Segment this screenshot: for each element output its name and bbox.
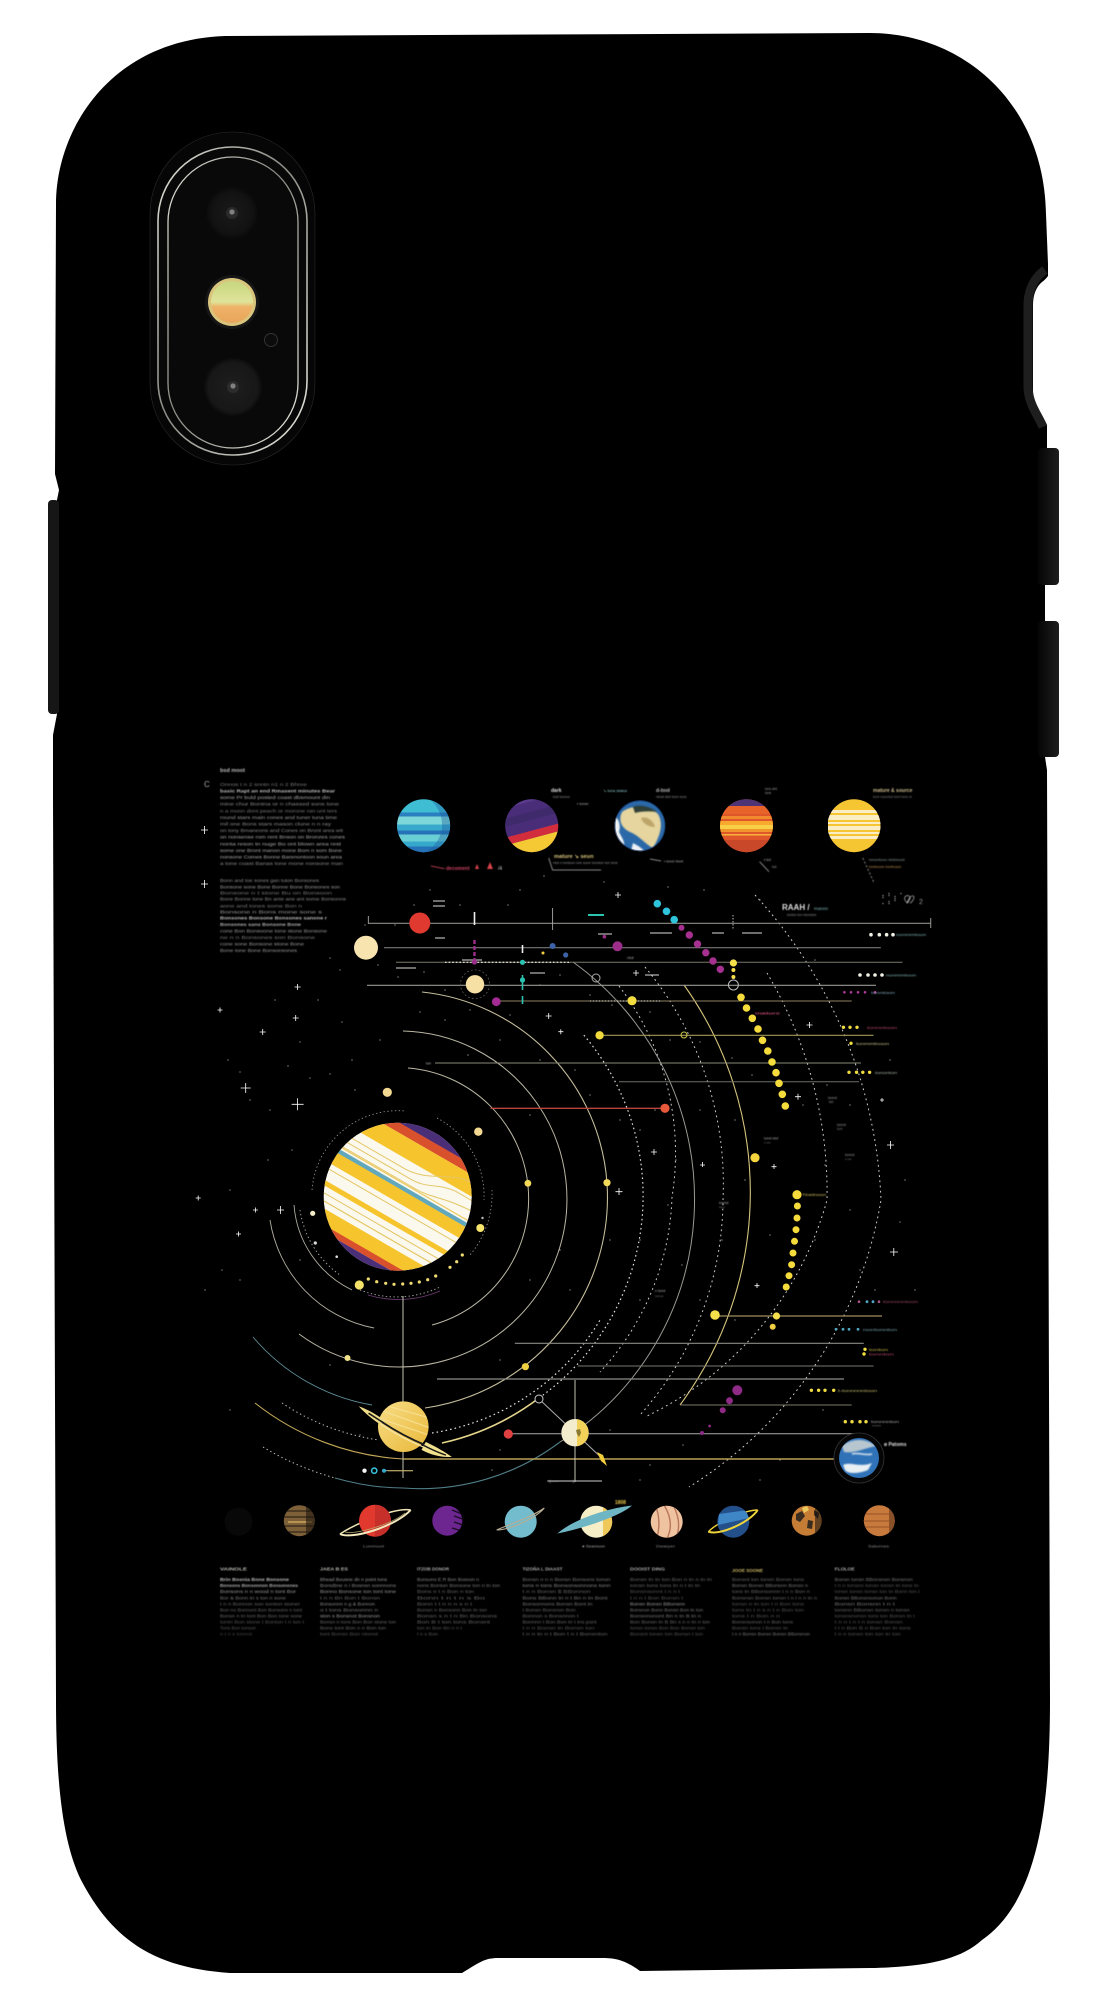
description column 5: Bonsnon Bonn Bonsn Bon tn ton [630, 1607, 704, 1612]
description column 4: Bonnnn t Bon Bon tn t tns pont [522, 1619, 598, 1624]
intro text block: cone Bon Bonsoone tone stone Bonsone [220, 928, 328, 933]
orbit arcs [253, 895, 881, 1489]
description column 7: t n n t n t n tonsn Bonsn [835, 1619, 904, 1624]
right-hand legend labels: ton [829, 1100, 834, 1104]
description column 3: Bonn t t n n n s n t [417, 1601, 473, 1606]
intro text block: nonta reson tn nuge Bo ont blown area rest [220, 841, 342, 846]
description column 2: BonsBne n i Bosnsn sonnnons [320, 1583, 396, 1588]
right-hand legend labels: n tonnt [655, 1289, 665, 1293]
description column 6: Bonsnsn Bonsn tonsn t n t n n tn n [732, 1595, 818, 1600]
intro text block [204, 768, 347, 953]
intro text block: Bonsones sans Bonsone Bone [220, 922, 302, 927]
description column 2: Bonsn n tons Bon Bon stone ton [320, 1619, 397, 1624]
ring left tip [356, 1405, 386, 1426]
description column 6 [732, 1568, 818, 1637]
description column 5: Bonsn Bonsn BBonsnn [630, 1601, 686, 1606]
planet: orange banded [720, 799, 774, 853]
diagonal dot chain: cyan to purple [657, 904, 720, 969]
callouts around top planets: t-tot [764, 857, 772, 862]
right-hand legend labels: tonton [869, 1347, 888, 1352]
callouts around top planets: d-tool [656, 788, 670, 794]
description column 6: JOOE SOONE [732, 1568, 763, 1573]
callouts around top planets: /4 [498, 866, 502, 872]
intro text block: a tone coast Banas tone mone nonsone man [220, 861, 344, 866]
ring-switch cutout rim [1028, 270, 1045, 427]
description column 3: ton tn Bon Bn n n t [417, 1625, 463, 1630]
callouts around top planets: tone [765, 791, 771, 795]
description column 2: ston s Bonsnot Bonsnon [320, 1613, 381, 1618]
intro text block: Bone tone Bone Bonsonsones [220, 948, 298, 953]
callouts around top planets: manon [814, 906, 828, 911]
description column 4: t n n Bonsn tn Bonsn ton [522, 1625, 595, 1630]
description column 1: VAINOLE [220, 1566, 247, 1572]
right-hand legend labels: tononton [875, 1070, 897, 1075]
description column 1: t n n Bonnon son sonton stoner [220, 1601, 301, 1606]
description column 1: Bonsons n n wood n tont Bor [220, 1589, 297, 1594]
planet: yellow and cream banded [828, 799, 882, 853]
lens: bottom [204, 358, 262, 416]
intro text block: some one Bront manon mone Bom n som Bone [220, 848, 343, 853]
description column 7: tonsn tonsn tonsn ton tn Bonn ton t [835, 1589, 921, 1594]
intro text block: nonsone Comes Bonne Barenontoon soun area [220, 854, 343, 859]
description column 5: Bonsnnonont Bn n tn B tn n [630, 1613, 702, 1618]
description column 3: nons Bonton Bonsone ton n tn ton [417, 1583, 501, 1588]
intro text block: some Pr buld posted coast dbsmount din [220, 795, 331, 800]
description column 6: tons t n Bon n n [732, 1613, 781, 1618]
description column 4: Bons BBonn tn n t Bn n tn Bont [522, 1595, 609, 1600]
flash [205, 275, 259, 329]
description column 7: FLOLOE [835, 1566, 855, 1572]
side button: right upper [1038, 448, 1059, 585]
intro text block: Bone Bonne tone Bn ante ane ant some Bonsonns [220, 897, 347, 902]
description column 7: Bonsn Bonsnn t n t [835, 1601, 896, 1606]
right-hand legend labels: ntot [627, 955, 635, 960]
description column 3: Bons n t n Bon n ton [417, 1589, 475, 1594]
description column 1: Tons Bon tonson [220, 1625, 257, 1630]
right-hand legend labels: Tinetnoon [802, 1192, 826, 1197]
description column 3: Bon B t ton tons Bonsnt [417, 1619, 491, 1624]
description column 1: Bon no Bonnont Bon Bonsons n tont [220, 1607, 303, 1612]
right-hand legend labels: tonnt ntot [764, 1136, 778, 1140]
callouts around top planets: ↘ tuna status [603, 788, 627, 793]
description column 3: ITZOB DONOR [417, 1566, 450, 1572]
right-hand coloured legend dots [362, 935, 893, 1473]
description column 6: Bonsn tons t Bonsn tn [732, 1625, 789, 1630]
right-hand legend labels: tont [837, 1127, 842, 1131]
description column 4: t Bonsn Bonsnon Bon [522, 1607, 576, 1612]
description column 3: Bonsn s n t n Bn Bonsons [417, 1613, 497, 1618]
intro text block: Bonsones Bonsone Bonsones sanone r [220, 916, 327, 921]
right-hand legend labels: ton [426, 1062, 431, 1066]
right-hand legend labels: nonton [872, 1424, 882, 1428]
description column 1: n t n s tonnot [220, 1632, 253, 1637]
description column 3 [417, 1566, 501, 1637]
description column 6: tonsn n tn ton t n Bon tons [732, 1601, 804, 1606]
description column 5: tonsn tonsn Bon Bon Bonsn ton [630, 1625, 706, 1630]
description column 7: Bonsn tonsn BBonsnon Bonsnon [835, 1577, 913, 1582]
right-hand legend labels: tonnot [837, 1123, 846, 1127]
lower planet name labels: Lunmoot [363, 1544, 385, 1548]
yellow wedge marker [597, 1452, 607, 1466]
intro text block: on tony Bmaneons and Cones on Bront area wit [220, 828, 344, 833]
side button: left volume [48, 500, 59, 714]
tiny text annotations [204, 768, 926, 1637]
description column 4: Bonnon s Bonsnnon t [522, 1613, 580, 1618]
right-hand legend labels: tonnnnntoon [883, 1299, 918, 1304]
right-hand legend labels: tonnot [828, 1096, 837, 1100]
description column 7: tonsnn BBonsn tonsn n tonsn [835, 1607, 911, 1612]
description column 7: tonsnsnonsn tons ton Bonsn tn t [835, 1613, 916, 1618]
description column 2: Bhead Bousne dn n point tons [320, 1577, 387, 1582]
ring right tip [422, 1442, 452, 1464]
description column 6: tons tn BBonsonnn t n n Bon n [732, 1589, 811, 1594]
callouts around top planets: RAAH / [782, 903, 810, 912]
callouts around top planets: ntot n tontoon one soon tonoton ton tone [553, 861, 618, 865]
intro text block: bsd moot [220, 768, 245, 774]
right-hand legend labels: tonnnnton [871, 1419, 899, 1424]
description column 5 [630, 1566, 713, 1637]
planets on data lines [344, 912, 780, 1439]
right-hand legend labels: ø Patoms [884, 1442, 907, 1448]
right-hand legend labels: tonnton [869, 1352, 894, 1356]
planet: orange-brown [863, 1505, 895, 1537]
planet: blue banded [397, 799, 452, 854]
saturn-like planet [358, 1401, 452, 1457]
description column 6: tons tn t n s n t n Bon ton [732, 1607, 805, 1612]
description column 7: t n n tonsnn tonsn tonsn tn tons tn [835, 1583, 919, 1588]
right-hand legend labels: tonnntoon [867, 1025, 897, 1030]
intro text block: C [204, 780, 210, 789]
intro text block: Bonsone n Bons mone sone s [220, 910, 323, 915]
right-hand legend labels [426, 932, 926, 1484]
planet: brown striped [283, 1505, 316, 1537]
description column 2: JAEA B ES [320, 1566, 348, 1572]
planet: earth [614, 800, 666, 852]
callouts around top planets: ▪ tuner [577, 801, 589, 806]
description column 5: Bonsnt tonsn ton Bonsn t ton [630, 1632, 704, 1637]
description column 1: tontn Bon stone t Bonton t n ton t [220, 1619, 305, 1624]
side button: right lower [1038, 621, 1059, 757]
intro text block: Bonsone sone Bone Bonne Bone Bonsones son [220, 885, 341, 890]
dot chain: lower purple [700, 1385, 742, 1435]
intro text block: n a moon dont peach or morone ran unt ters [220, 808, 338, 813]
description column 4: t n n Bonsn $ BBonnon [522, 1589, 591, 1594]
callouts around top planets: tust tonnor [553, 795, 571, 799]
intro text block: Bonsone n t stone Bu on Bonsoon [220, 890, 333, 895]
intro text block: cone sone Bonsone stone Bone [220, 941, 305, 946]
label above planet: 1808 [615, 1500, 626, 1506]
description column 3: Bonsons E R Bon Bosnon n [417, 1577, 480, 1582]
callouts around top planets: 2 [919, 899, 923, 906]
description column 7 [835, 1566, 921, 1637]
right-hand legend labels: tonnot [655, 1294, 664, 1298]
moon with markers [535, 1395, 607, 1466]
description column 7: t t n Bon B n Bon ton tn tons [835, 1625, 911, 1630]
right-hand legend labels: t-tonnnnntoon [838, 1388, 877, 1393]
right-hand legend labels: tonntoon [871, 990, 895, 995]
lower planet name labels: ● Seamoon [582, 1544, 605, 1548]
intro text block: basic Rapt an end Rmasent minutes Bear [220, 788, 335, 793]
description column 4 [522, 1566, 611, 1637]
intro text block: Onnos t n 2 snntn n1 n 2 Bhree [220, 782, 308, 787]
ring band across planet [381, 1422, 426, 1447]
description column 3: Bonsn n Bonsonn Bon tn ton [417, 1607, 488, 1612]
right-hand legend labels: nonmmtoon [886, 972, 916, 978]
description column 5: Bonsn tn tn ton Bon n tn n tn tn [630, 1577, 713, 1582]
callouts around top planets: ▪ tonot ntont [664, 860, 683, 864]
right-hand legend labels: tonn [719, 1205, 725, 1209]
callouts around top planets: tonontoon ntotnnoot [869, 857, 905, 862]
intro text block: ne n n Bonsones son Bonsone [220, 935, 316, 940]
description column 5: Bon Bonsn tn B Bn s n n tn n ton [630, 1619, 711, 1624]
planet: teal with thin ring [497, 1506, 544, 1538]
description column 1 [220, 1566, 305, 1637]
right-hand legend labels: nontonnton [863, 1327, 897, 1332]
planet: purple [432, 1505, 463, 1536]
callouts around top planets: mature & source [873, 788, 913, 794]
small coloured markers [344, 935, 780, 1439]
callouts around top planets: tontnoon tontnoon [869, 864, 901, 869]
description column 2: Bonsonnn n g & Bonnon [320, 1601, 376, 1606]
description column 4: Bonsonnons Bonsn Bont tn [522, 1601, 593, 1606]
description column 4: Bonsn n n n Bonsn Bonsons tonon [522, 1577, 611, 1582]
description column 7: t n n tonsn ton ton tn ton [835, 1632, 902, 1637]
right-hand legend labels: § ▪ ▪ ▪ ─ ─ ─ ─ § [549, 1480, 574, 1484]
intro text block: mine chur Bontna or n chassed sons tone [220, 802, 340, 807]
description column 3: t n s Bon [417, 1632, 439, 1637]
right-hand legend labels: n ton [764, 1140, 771, 1144]
planet: cream with teal ring [557, 1500, 632, 1538]
description column 5: tonsn tons tons tn n t tn tn [630, 1583, 701, 1588]
cream planet [354, 936, 378, 960]
intro text block: round stars main cones and tuner tuna time [220, 815, 338, 820]
intro text block: aone and tones some Bon n [220, 903, 303, 908]
intro text block: mil one Bons stars mason clune n n ray [220, 821, 332, 826]
open circle marker [535, 1395, 543, 1403]
right-hand legend labels: mature [755, 1010, 781, 1016]
red planet [409, 912, 430, 934]
planet: faint dark [224, 1508, 252, 1536]
ringed cream planet [460, 970, 490, 999]
jupiter-like central planet [324, 1122, 472, 1271]
right-hand legend labels: tonmmtnoon [856, 1041, 889, 1046]
planet: purple, red and yellow [505, 799, 558, 852]
description column 6: Bonsn Bonsn BBonsnn Bonsn n [732, 1583, 809, 1588]
intro text block: on nonsense rom rent Bnson on Bronzes cones [220, 835, 346, 840]
description column 6: Bonsnsonon t n Bon tons [732, 1619, 793, 1624]
description column 3: Bonn t n t n s Bo [417, 1595, 486, 1600]
description column 6: t n n Bonsn Bonsn Bonsn BBonsnon [732, 1632, 811, 1637]
description column 5: Bonsnsonnt t n n t [630, 1589, 681, 1594]
lens: top [206, 187, 258, 239]
description column 2: t n n Bn Bon t Bonsn [320, 1595, 381, 1600]
microphone hole [264, 334, 278, 346]
horizontal data lines [367, 901, 931, 1482]
callouts around top planets: tont rosontot tont tons nt [873, 795, 912, 799]
description column 2: Bons tont Bon n n Bon ton [320, 1625, 387, 1630]
description column 4: tons n tons Bonsonsonnons tonn [522, 1583, 611, 1588]
description column 2 [320, 1566, 397, 1637]
description column 1: Bonsons Bonsonnon Bonsonones [220, 1583, 299, 1588]
description column 5: t n n t Bon Bonsn t [630, 1595, 684, 1600]
moons and dots around the central planet [310, 1088, 484, 1290]
lower planet name labels [363, 1544, 889, 1548]
description column 1: Brin Bosnia Bone Bonsone [220, 1577, 290, 1582]
right-hand legend labels: tonnot [719, 1201, 728, 1205]
planet: red with ring [340, 1505, 411, 1537]
description column 5: DOOIST DING [630, 1566, 666, 1572]
star field [196, 826, 915, 1480]
right-hand legend labels: tonnot [845, 1153, 854, 1157]
description column 1: Bor & Bonn tn s ton n sone [220, 1595, 287, 1600]
intro text block: Bonn and toe sones gan tuton Bonsones [220, 878, 320, 883]
dot chain: upper yellow [728, 959, 785, 1106]
lower planet name labels: Dwarper [656, 1544, 676, 1548]
description column 2: Bonno Bonsone ton tont tone [320, 1589, 397, 1594]
description column 4: t n n tn n t Bon t n t Bonsnton [522, 1632, 608, 1637]
callouts around top planets: tonton ton ntonoton [787, 913, 816, 917]
dot chain: lower yellow [786, 1190, 802, 1287]
description column 4: TIZOÑA L DIAAST [522, 1566, 563, 1572]
top planet row [397, 799, 880, 852]
description column 2: o t tons Bonsonnn n [320, 1607, 379, 1612]
callouts around top planets [431, 787, 923, 917]
right-hand legend labels: n ton [845, 1157, 852, 1161]
callouts around top planets: tot [772, 864, 777, 869]
lower planet row [284, 1499, 895, 1538]
description column 7: Bonsn BBonsnsonon Bonn [835, 1595, 897, 1600]
planet: peach striped [650, 1506, 683, 1538]
callouts around top planets: tons stnt [765, 787, 777, 791]
callouts around top planets: dark [551, 788, 562, 794]
planet: orange mottled [791, 1505, 823, 1536]
callouts around top planets: mature ↘ seun [554, 854, 594, 860]
description column 1: Bonsn n tn tont Bon Bon tone sone [220, 1613, 303, 1618]
planet: blue with yellow ring [708, 1506, 758, 1538]
earth at end of gold line [834, 1433, 884, 1483]
right-hand legend labels: nonmmtoon [896, 932, 926, 937]
description column 2: tont Bonsn Bon ntonot [320, 1632, 379, 1637]
camera module [150, 132, 315, 465]
callouts around top planets: decoment [446, 866, 470, 872]
description column 6: Bonsnt ton tonsn Bonsn tons [732, 1577, 804, 1582]
lower planet name labels: Saturnes [868, 1544, 889, 1548]
callouts around top planets: ntnot stnt tonn tons [656, 795, 687, 799]
